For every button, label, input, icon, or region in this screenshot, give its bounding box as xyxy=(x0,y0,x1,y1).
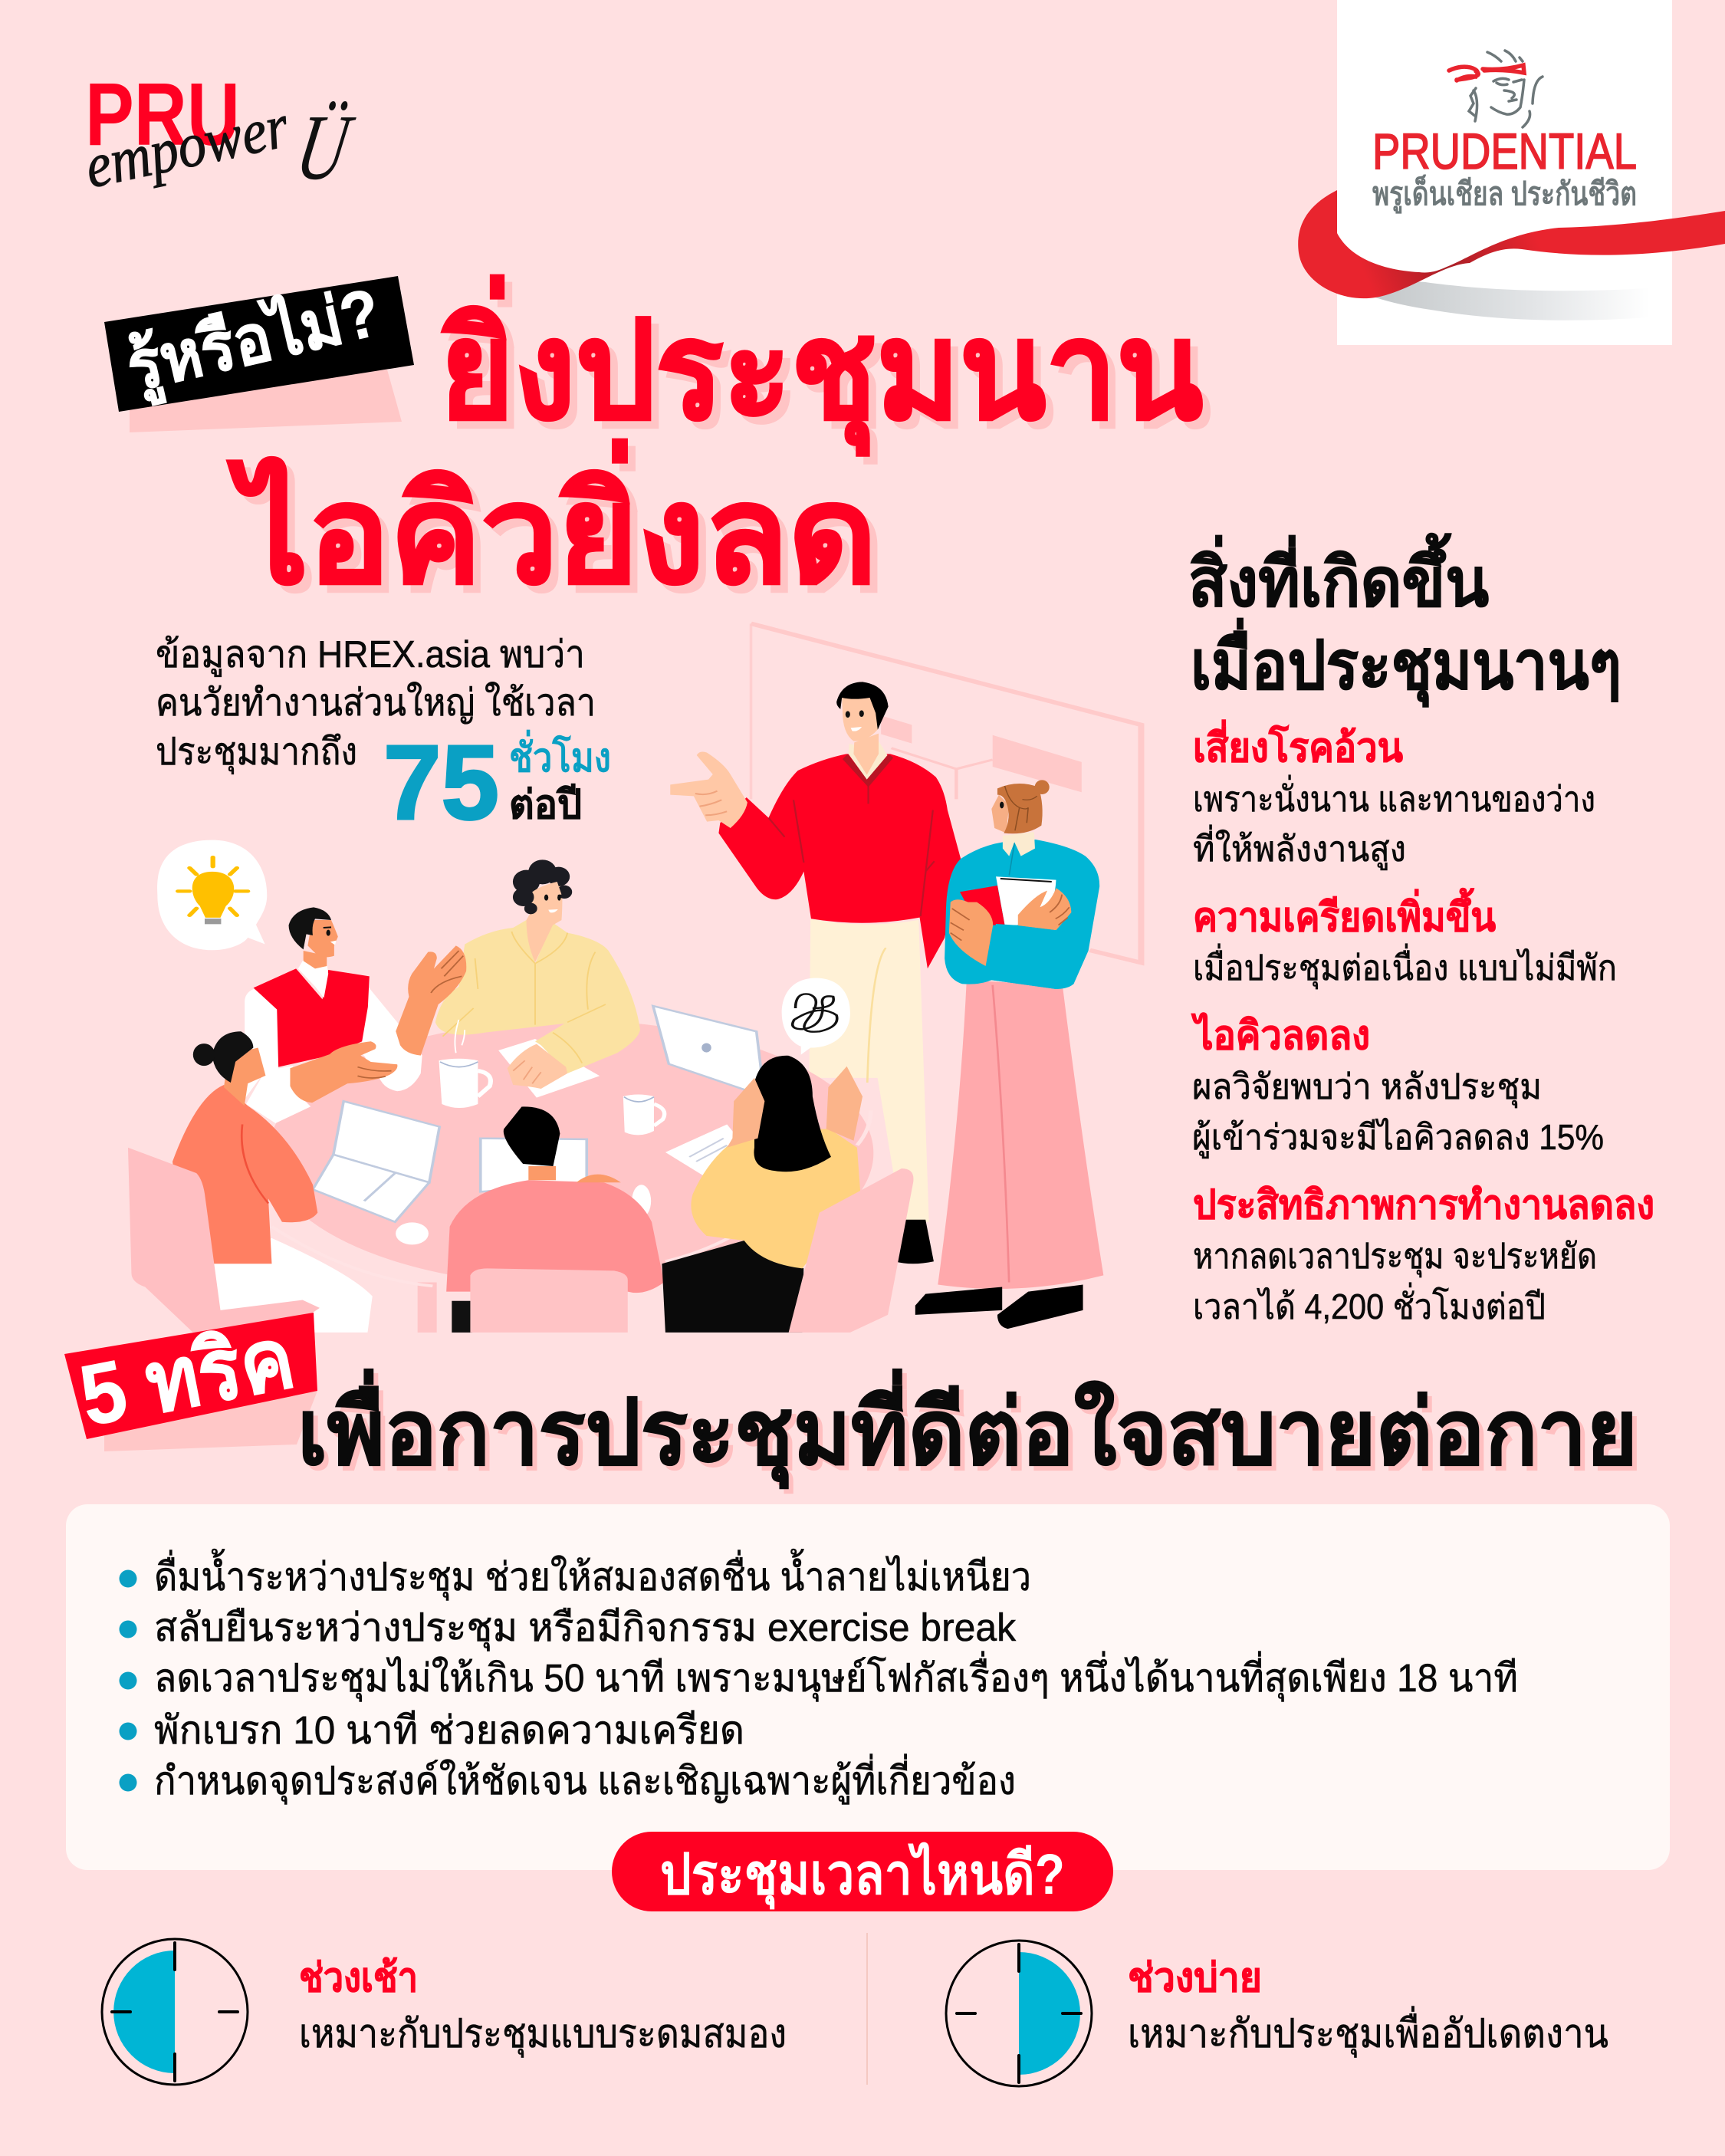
logo: Prudence head xyxy=(1449,51,1543,127)
item: productivity: หากลดเวลาประชุม จะประหยัด xyxy=(1193,1236,1597,1278)
clock: morning xyxy=(102,1939,248,2085)
item: productivity xyxy=(1193,1183,1654,1326)
item: IQ drop xyxy=(1191,1012,1604,1159)
text: morning: ช่วงเช้า xyxy=(299,1956,418,2000)
chair right xyxy=(789,1168,913,1333)
logo panel: Prudential: PRUDENTIAL xyxy=(1372,123,1637,179)
seated man in red vest xyxy=(245,907,466,1123)
speech bubble: tangled thoughts xyxy=(782,978,850,1055)
chair left xyxy=(128,1148,320,1333)
item: obesity risk: เพราะนั่งนาน และทานของว่าง xyxy=(1193,774,1595,819)
standing woman: skirt and shoes xyxy=(915,981,1103,1329)
seated long-haired woman xyxy=(662,1056,863,1333)
text: afternoon xyxy=(1128,1956,1608,2058)
clock: afternoon xyxy=(946,1941,1092,2086)
title xyxy=(227,275,1211,619)
panel: what happens in long meetings xyxy=(1188,533,1654,1326)
text: morning: เหมาะกับประชุมแบบระดมสมอง xyxy=(299,2012,787,2058)
seated curly man xyxy=(435,859,640,1098)
badge: รู้หรือไม่?: รู้หรือไม่? xyxy=(120,274,388,409)
item: stress: ความเครียดเพิ่มขึ้น xyxy=(1193,888,1496,940)
whiteboard xyxy=(751,623,1141,963)
panel heading: เมื่อประชุมนานๆ xyxy=(1191,618,1622,708)
title: ยิ่งประชุมนาน xyxy=(440,275,1203,456)
stat: 75 hours per year: ต่อปี xyxy=(509,783,582,827)
pill: when to meet: ประชุมเวลาไหนดี? xyxy=(660,1841,1065,1910)
presenter: legs xyxy=(809,919,934,1264)
speech bubble: light bulb xyxy=(157,840,267,950)
coffee mugs xyxy=(439,1020,665,1135)
logo panel: Prudential xyxy=(1298,0,1725,345)
stat: 75 hours per year: ชั่วโมง xyxy=(509,730,611,781)
heading: tricks: เพื่อการประชุมที่ดีต่อใจสบายต่อกาย xyxy=(302,1374,1642,1494)
presenter: upper body xyxy=(670,682,961,968)
item: productivity: เวลาได้ 4,200 ชั่วโมงต่อปี xyxy=(1193,1282,1546,1326)
ribbon: grey shadow swoosh xyxy=(1375,282,1650,320)
item: stress: เมื่อประชุมต่อเนื่อง แบบไม่มีพัก xyxy=(1193,943,1617,990)
seated man, back view xyxy=(446,1106,664,1333)
text: afternoon: เหมาะกับประชุมเพื่ออัปเดตงาน xyxy=(1128,2006,1608,2058)
tip 5: กำหนดจุดประสงค์ให้ชัดเจน และเชิญเฉพาะผู้ที่เกี่ยวข้อง xyxy=(154,1754,1016,1805)
heading: tricks: เพื่อการประชุมที่ดีต่อใจสบายต่อกาย xyxy=(297,1369,1638,1489)
item: IQ drop: ผู้เข้าร่วมจะมีไอคิวลดลง 15% xyxy=(1192,1117,1604,1159)
logo: Pru empower U: empower xyxy=(79,90,295,202)
tip 1: ดื่มน้ำระหว่างประชุม ช่วยให้สมองสดชื่น น้ำลายไม่เหนียว xyxy=(154,1549,1031,1601)
stat: 75 hours per year xyxy=(383,724,611,842)
illustration: meeting scene xyxy=(128,623,1141,1333)
item: obesity risk: ที่ให้พลังงานสูง xyxy=(1193,824,1406,870)
tip 2: สลับยืนระหว่างประชุม หรือมีกิจกรรม exercise break xyxy=(154,1605,1016,1652)
logo: Pru empower U: Ü xyxy=(289,95,360,199)
text: morning xyxy=(299,1956,787,2058)
badge: 5 tricks: 5 ทริค xyxy=(73,1309,301,1444)
logo: Pru empower U: PRU xyxy=(85,64,240,164)
title: ไอคิวยิ่งลด xyxy=(227,439,877,611)
woman with bun, coral top xyxy=(172,1031,373,1333)
intro text xyxy=(156,634,596,774)
panel heading: สิ่งที่เกิดขึ้น xyxy=(1188,533,1489,620)
item: IQ drop: ไอคิวลดลง xyxy=(1191,1012,1370,1058)
item: IQ drop: ผลวิจัยพบว่า หลังประชุม xyxy=(1192,1066,1542,1109)
title: ยิ่งประชุมนาน xyxy=(448,283,1211,464)
panel heading xyxy=(1188,533,1622,708)
intro text: ข้อมูลจาก HREX.asia พบว่า xyxy=(156,634,585,677)
standing woman: upper body xyxy=(945,780,1099,989)
laptops, papers, mouse xyxy=(313,1006,761,1244)
logo panel: Prudential: พรูเด็นเชียล ประกันชีวิต xyxy=(1372,174,1637,214)
item: stress xyxy=(1193,888,1617,990)
tip 3: ลดเวลาประชุมไม่ให้เกิน 50 นาที เพราะมนุษย์โฟกัสเรื่องๆ หนึ่งได้นานที่สุดเพียง 18 นาที xyxy=(154,1652,1518,1702)
ribbon: red wave xyxy=(1298,190,1725,298)
intro text: ประชุมมากถึง xyxy=(156,731,357,774)
table xyxy=(268,1020,873,1333)
intro text: คนวัยทำงานส่วนใหญ่ ใช้เวลา xyxy=(156,682,596,724)
title: ไอคิวยิ่งลด xyxy=(235,447,885,619)
tip 4: พักเบรก 10 นาที ช่วยลดความเครียด xyxy=(154,1708,744,1752)
stat: 75 hours per year: 75 xyxy=(383,724,499,842)
panel: tips list xyxy=(66,1504,1670,1870)
item: obesity risk: เสี่ยงโรคอ้วน xyxy=(1193,720,1403,771)
item: productivity: ประสิทธิภาพการทำงานลดลง xyxy=(1193,1183,1654,1228)
item: obesity risk xyxy=(1193,720,1595,870)
text: afternoon: ช่วงบ่าย xyxy=(1128,1956,1262,2000)
